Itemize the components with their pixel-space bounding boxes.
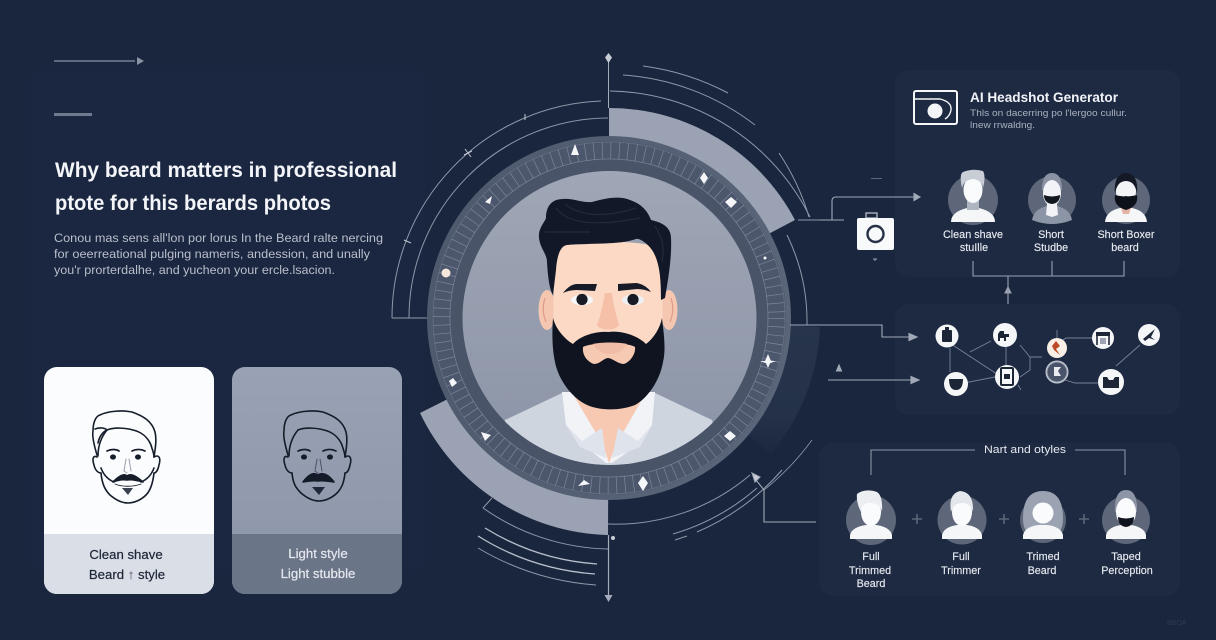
avatar: taped perception xyxy=(1102,490,1150,544)
portrait: bearded man in circular frame xyxy=(462,171,756,480)
avatar labels: Short Boxer xyxy=(1097,229,1155,241)
heading xyxy=(55,158,397,215)
connector: ring to top panel xyxy=(820,194,920,220)
thin orbit arcs xyxy=(392,66,832,585)
intro paragraph: Conou mas sens all'lon por lorus In the Beard ralte nercing xyxy=(54,231,383,245)
panel description xyxy=(970,108,1127,130)
panel description: lnew rrwaldng. xyxy=(970,120,1035,130)
connector: avatars bracket and arrow xyxy=(973,261,1124,315)
icon: line-art face with moustache xyxy=(284,411,351,501)
lips xyxy=(593,342,627,354)
avatar labels: Studbe xyxy=(1034,242,1068,254)
accent bar xyxy=(54,113,92,116)
connector: ring to network panel lower xyxy=(828,365,919,384)
panel description: Thls on dacerring po l'lergoo cullur. xyxy=(970,108,1127,118)
connector: bottom arrow to styles panel xyxy=(752,473,816,522)
intro paragraph: you'r prorterdalhe, and yucheon your ercle.lsacion. xyxy=(54,263,335,277)
connector: ring to network panel upper xyxy=(790,325,917,340)
avatar labels: Trimmer xyxy=(941,565,981,577)
icon: camera badge xyxy=(914,91,957,124)
bracket xyxy=(871,450,1125,475)
plus signs xyxy=(912,514,1089,524)
avatar labels xyxy=(849,551,1153,590)
icon: line-art face with light beard xyxy=(93,411,160,503)
eyes xyxy=(571,294,644,305)
panel: styles row xyxy=(819,443,1180,596)
avatar: short boxer beard xyxy=(1102,173,1150,224)
avatar labels: Trimmed xyxy=(849,565,891,577)
hair xyxy=(539,198,671,300)
icon: camera xyxy=(857,178,894,261)
brows xyxy=(563,283,651,293)
avatar labels: Taped xyxy=(1111,551,1141,563)
nose xyxy=(597,293,619,330)
segment: top right arc block xyxy=(609,108,795,318)
avatar labels: Perception xyxy=(1101,565,1153,577)
top pointer line with diamond xyxy=(605,53,612,108)
card: light stubble xyxy=(232,367,402,594)
ring sparkles xyxy=(442,144,776,491)
heading: Why beard matters in professional xyxy=(55,158,397,182)
bottom pointer line with marker xyxy=(604,535,615,602)
avatar labels: Beard xyxy=(857,578,885,590)
avatar: full trimmed beard xyxy=(846,490,896,545)
network links xyxy=(950,330,1140,390)
avatar: trimmed beard xyxy=(1020,491,1066,543)
heading: ptote for this berards photos xyxy=(55,191,331,215)
avatar labels: Short xyxy=(1038,229,1064,241)
card label: Beard ↑ style xyxy=(89,567,165,582)
avatar: clean shave xyxy=(948,170,998,225)
card label xyxy=(89,547,165,582)
avatar labels: beard xyxy=(1111,242,1139,254)
avatar labels: Clean shave xyxy=(943,229,1003,241)
card label xyxy=(281,546,355,581)
avatar labels: stuIlle xyxy=(960,242,988,254)
avatar labels: Beard xyxy=(1028,565,1056,577)
shirt xyxy=(504,392,712,465)
panel heading: Nart and otyles xyxy=(984,444,1067,456)
avatar: full trimmer xyxy=(938,491,986,544)
avatar labels: Full xyxy=(862,551,880,563)
avatar labels: Full xyxy=(952,551,970,563)
ears xyxy=(538,290,678,330)
panel title: AI Headshot Generator xyxy=(970,90,1119,105)
beard xyxy=(552,318,665,409)
card: clean shave xyxy=(44,367,214,594)
card label: Light stubble xyxy=(281,566,355,581)
panel: AI headshot generator xyxy=(895,70,1180,277)
network nodes xyxy=(936,323,1160,396)
avatar labels: Trimed xyxy=(1026,551,1060,563)
intro paragraph xyxy=(54,231,383,277)
segment: right dark arc block xyxy=(609,318,820,454)
avatar: short stubble xyxy=(1028,173,1076,224)
card label: Clean shave xyxy=(89,547,163,562)
ring with ticks xyxy=(427,136,791,500)
face xyxy=(553,242,663,344)
card label: Light style xyxy=(288,546,348,561)
mouth area xyxy=(583,343,635,364)
avatar labels xyxy=(943,229,1155,254)
intro paragraph: for oeerreational pulging nameris, andession, and unally xyxy=(54,247,371,261)
corner mark: BBOA xyxy=(1167,620,1187,627)
panel: network of icons xyxy=(895,304,1180,415)
segment: bottom left arc block xyxy=(420,318,609,535)
top-left arrow line xyxy=(54,57,144,65)
